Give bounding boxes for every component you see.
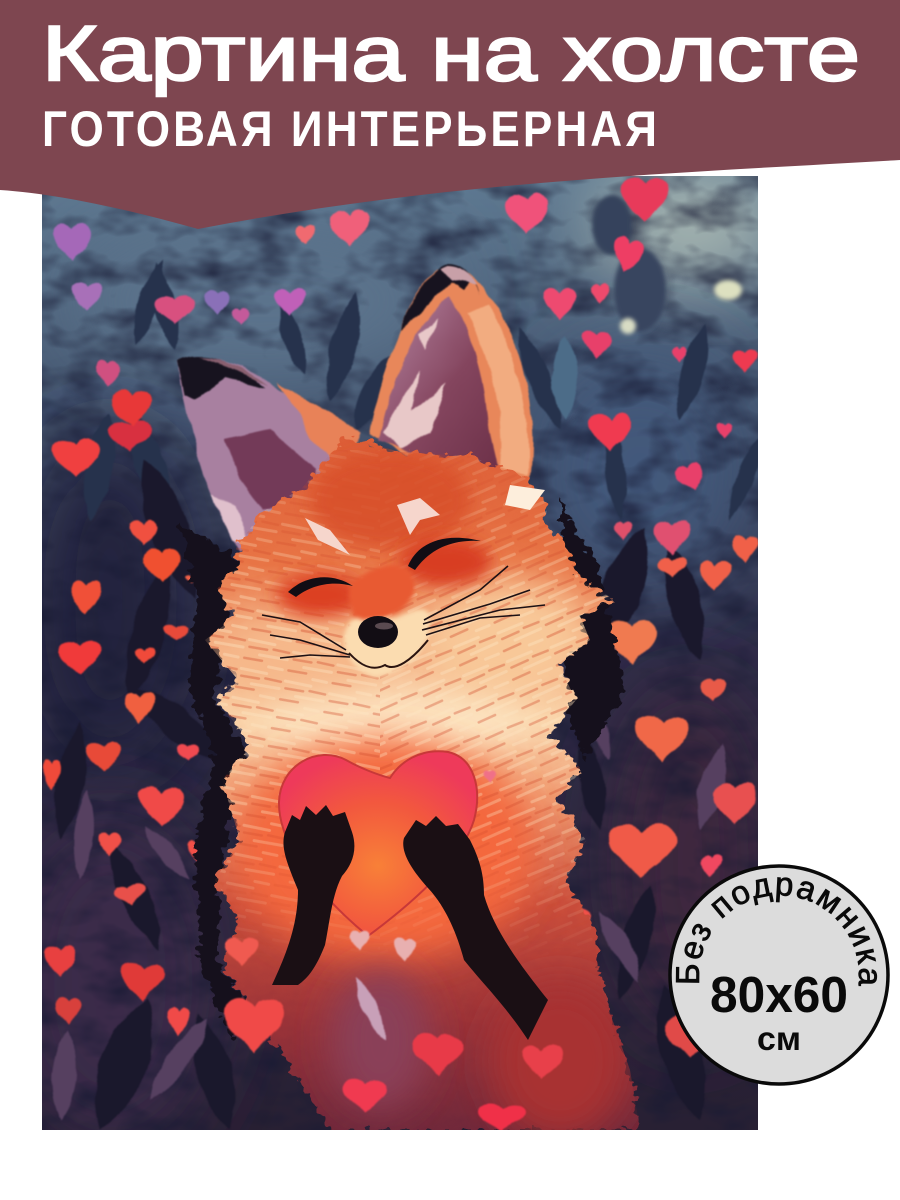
left closed eye bbox=[288, 577, 353, 597]
dark fur shadow around fox bbox=[178, 500, 625, 1040]
muzzle bbox=[344, 609, 430, 677]
painting: fox with heart on canvas bbox=[42, 176, 758, 1130]
header banner bbox=[0, 0, 900, 229]
glowing heart bbox=[279, 751, 477, 936]
fox body and head fur bbox=[180, 436, 640, 1140]
fox paws bbox=[272, 805, 548, 1040]
painting background bbox=[42, 176, 758, 1130]
badge arc text: Без подрамника bbox=[676, 877, 878, 986]
title: Картина на холсте bbox=[42, 9, 860, 97]
snout bridge bbox=[349, 565, 415, 628]
right paw and arm bbox=[403, 816, 548, 1040]
right closed eye bbox=[408, 538, 481, 570]
whiskers bbox=[262, 566, 545, 658]
right ear bbox=[370, 265, 532, 480]
foliage leaves bbox=[46, 256, 769, 1138]
badge size: 80x60 bbox=[710, 966, 848, 1023]
left ear bbox=[178, 357, 360, 552]
left paw and arm bbox=[272, 805, 354, 985]
badge unit: см bbox=[757, 1020, 801, 1057]
scattered hearts bbox=[42, 177, 757, 1060]
subtitle: ГОТОВАЯ ИНТЕРЬЕРНАЯ bbox=[42, 101, 660, 157]
small lower hearts bbox=[224, 770, 562, 1131]
fox bbox=[178, 265, 640, 1140]
badge: size without stretcher bbox=[668, 864, 890, 1086]
mouth bbox=[349, 640, 428, 668]
nose bbox=[358, 616, 398, 648]
ears bbox=[178, 265, 532, 552]
